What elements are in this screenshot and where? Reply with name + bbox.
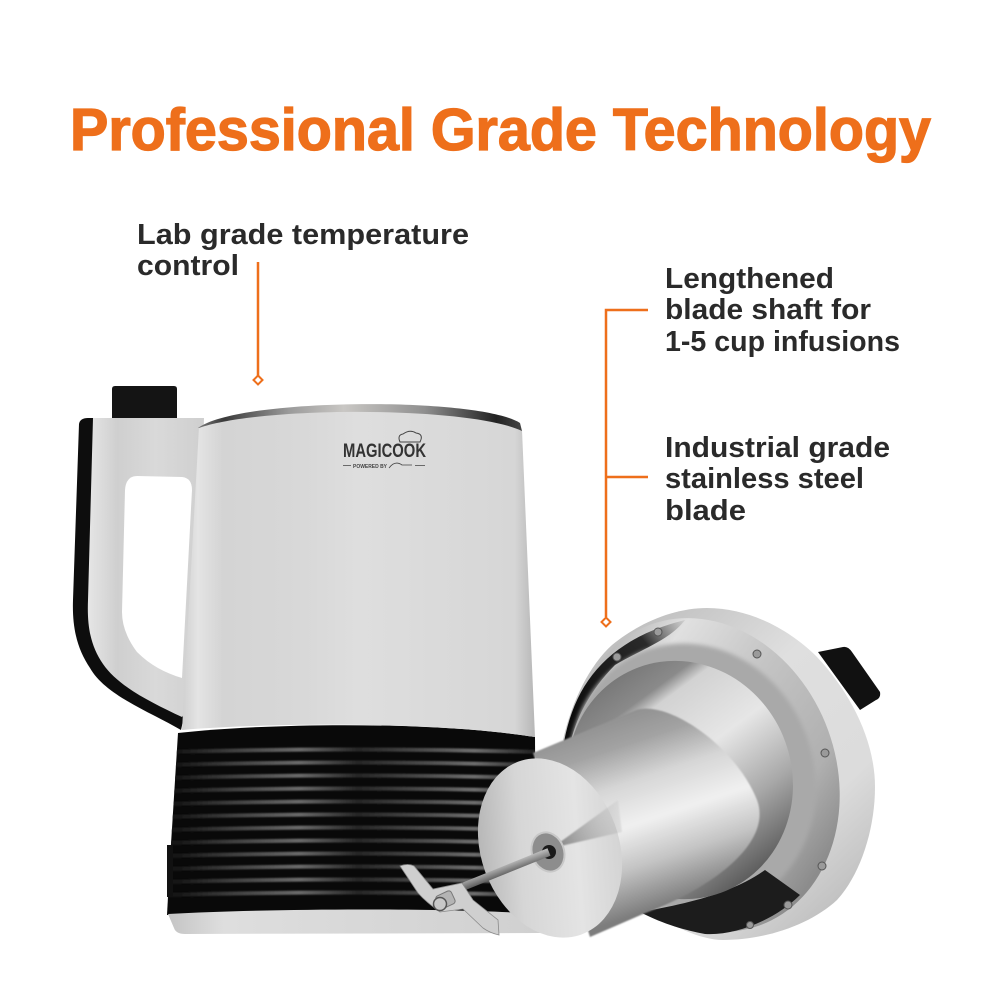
dark collar upper left	[564, 620, 685, 745]
callout text: stainless steel blade: blade	[665, 495, 746, 527]
hub	[526, 828, 570, 876]
base side bump	[167, 845, 173, 897]
base plate	[168, 910, 540, 934]
blade	[400, 864, 499, 935]
callout text: lengthened blade shaft	[665, 263, 900, 358]
handle knob	[818, 647, 880, 710]
callout text: stainless steel blade	[665, 432, 890, 527]
logo: MAGICOOK	[343, 431, 426, 470]
logo: MAGICOOK: POWERED BY	[353, 464, 388, 470]
conical shoulder	[534, 629, 826, 931]
metal ring	[527, 580, 883, 970]
end cap	[454, 738, 646, 958]
hub hole	[542, 845, 556, 859]
leader lines to blade head	[602, 310, 648, 626]
handle black back	[73, 418, 185, 730]
callout: temperature control	[137, 219, 469, 384]
grey housing	[563, 608, 875, 940]
blade nut	[434, 890, 456, 910]
steel rim	[198, 404, 522, 431]
kettle	[73, 386, 540, 934]
blade shaft	[450, 852, 549, 892]
callout text: stainless steel blade: stainless steel	[665, 463, 864, 495]
callout text: lengthened blade shaft: Lengthened	[665, 263, 834, 295]
kettle body	[182, 410, 535, 737]
logo: MAGICOOK: MAGICOOK	[343, 441, 426, 462]
black base	[167, 725, 536, 915]
handle grey	[88, 418, 204, 717]
lower dark collar	[640, 870, 800, 934]
title: Professional Grade Technology	[70, 97, 931, 163]
lid tab	[112, 386, 177, 420]
callout text: lab grade temperature control: control	[137, 250, 239, 282]
callout text: lengthened blade shaft: blade shaft for	[665, 294, 871, 326]
cylinder	[533, 709, 760, 937]
callout text: lengthened blade shaft: 1-5 cup infusions	[665, 326, 900, 358]
leader line to rim	[254, 262, 262, 384]
base ribs	[165, 750, 540, 895]
callout: blade shaft and blade	[602, 263, 900, 626]
blade assembly	[400, 580, 883, 970]
conic shading on cap	[552, 800, 622, 848]
callout text: stainless steel blade: Industrial grade	[665, 432, 890, 464]
callout text: lab grade temperature control	[137, 219, 469, 282]
screws	[613, 628, 829, 928]
callout text: lab grade temperature control: Lab grade temperature	[137, 219, 469, 251]
step ring	[531, 608, 853, 948]
